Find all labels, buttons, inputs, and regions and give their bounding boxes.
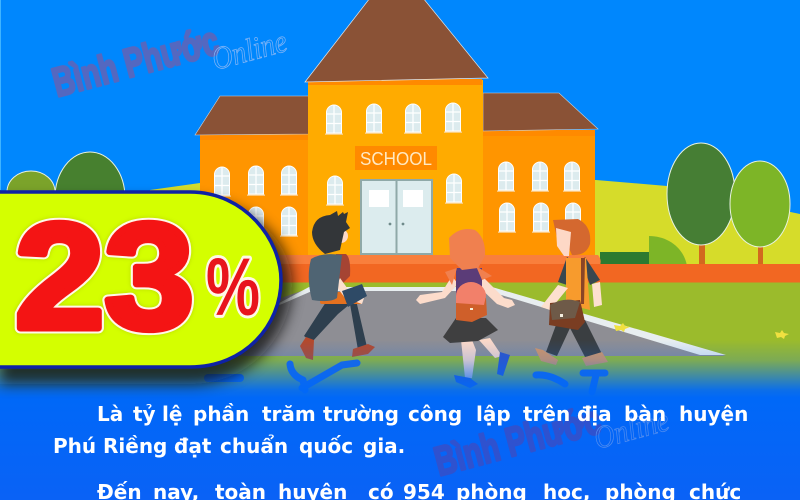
windows <box>213 103 582 237</box>
watermark top: Online <box>208 22 291 77</box>
right trees <box>600 143 790 266</box>
right wing <box>483 93 598 265</box>
grass <box>0 280 800 402</box>
line 1: địa <box>577 402 612 426</box>
watermark bottom: Online <box>590 401 673 456</box>
line 2: gia. <box>363 434 405 458</box>
shirt <box>320 254 362 304</box>
road <box>240 287 726 356</box>
line 1: trên <box>523 402 570 426</box>
head <box>553 219 590 256</box>
fade to blue <box>0 340 800 400</box>
shoes <box>535 348 608 366</box>
book <box>342 284 367 307</box>
vest <box>566 258 590 310</box>
watermark bottom: Bình Phước <box>429 396 606 485</box>
line 1: công <box>408 402 462 426</box>
line 2: Riềng <box>103 434 167 458</box>
boy with backpack <box>300 211 375 360</box>
torso <box>456 268 482 306</box>
backpack <box>309 254 342 301</box>
backpack <box>456 282 487 322</box>
line 2: đạt <box>174 434 212 458</box>
body text <box>53 402 748 500</box>
left trees <box>7 152 125 244</box>
arm <box>336 278 364 304</box>
legs <box>461 338 502 378</box>
girl <box>416 229 515 388</box>
head <box>312 211 350 254</box>
left wing <box>195 96 310 265</box>
kid reflections <box>208 363 605 392</box>
percent sign: % <box>206 242 260 333</box>
line 1: phần <box>193 402 249 426</box>
number 23 fill: 23 <box>15 192 194 360</box>
panel background <box>0 192 281 367</box>
line 2: Phú <box>53 434 96 458</box>
left edge highlight <box>0 0 1 190</box>
arms <box>541 282 602 310</box>
line 1: huyện <box>679 402 748 426</box>
school sign: SCHOOL <box>360 148 432 169</box>
legs <box>546 320 602 357</box>
line 2: chuẩn <box>220 434 288 458</box>
number 23 outline: 23 <box>15 192 194 360</box>
lower text background <box>0 398 800 500</box>
orange base band <box>200 255 800 282</box>
boy with satchel <box>535 219 608 366</box>
watermark top: Bình Phước <box>47 17 224 106</box>
line 2: quốc <box>299 434 353 458</box>
line 1: trường <box>323 402 399 426</box>
sleeves <box>558 257 600 286</box>
line 1: lệ <box>162 402 182 426</box>
skirt <box>443 318 498 343</box>
line 1: trăm <box>262 402 316 426</box>
shoes <box>300 337 375 360</box>
panel shadow <box>0 200 292 384</box>
line 1: bàn <box>624 402 666 426</box>
hill <box>150 180 800 290</box>
door <box>361 180 432 254</box>
number 23 glow: 23 <box>15 192 194 360</box>
shoes <box>454 352 510 388</box>
hair <box>445 229 492 285</box>
line 1: lập <box>476 402 511 426</box>
panel: 23 percent <box>0 192 281 367</box>
yellow flowers <box>614 323 789 339</box>
bag <box>549 258 585 330</box>
arms <box>416 276 515 308</box>
line 1: Là <box>97 402 123 426</box>
main block <box>305 0 488 265</box>
percent outline: % <box>206 242 260 333</box>
line 1: tỷ <box>133 402 156 426</box>
school building <box>195 0 598 265</box>
legs <box>304 300 367 350</box>
